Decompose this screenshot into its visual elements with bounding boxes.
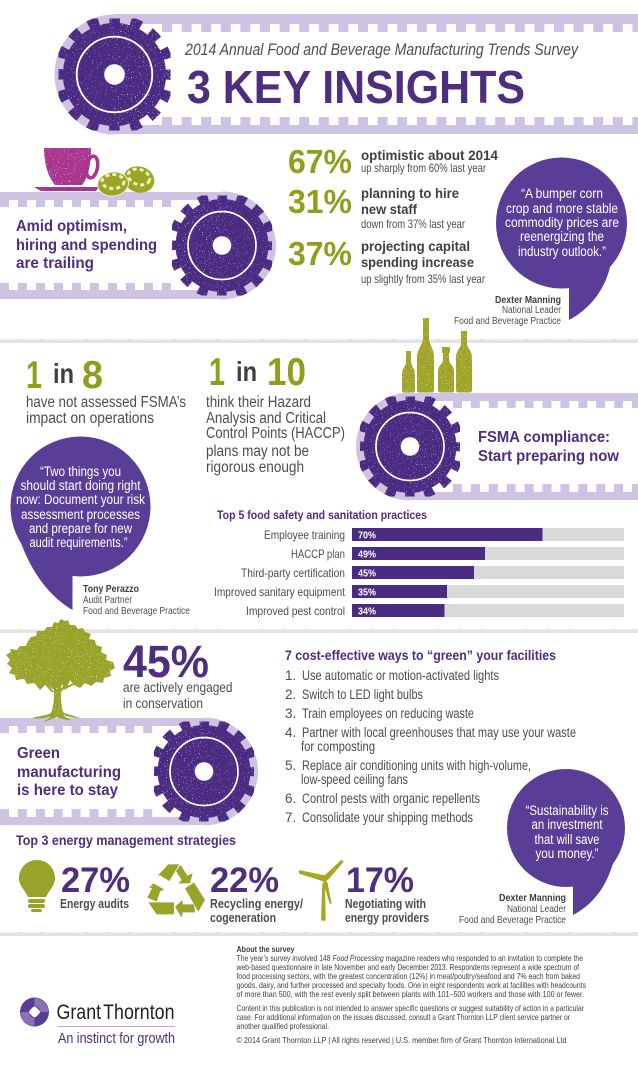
green heading: Green xyxy=(17,745,60,762)
bar: third-party certification xyxy=(241,566,624,580)
stat: 45% conservation: are actively engaged xyxy=(123,679,232,695)
list: 7 ways to green facilities: 2. xyxy=(285,687,296,702)
text block: about the survey: another qualified professional. xyxy=(236,1021,329,1031)
callout: corn quote: industry outlook.” xyxy=(518,244,606,259)
quote attribution: Dexter Manning: Food and Beverage Practice xyxy=(454,315,561,327)
bar: HACCP plan: HACCP plan xyxy=(291,547,345,561)
FSMA band xyxy=(356,392,638,500)
green heading: is here to stay xyxy=(17,782,118,799)
stat: 1 in 8: 1 xyxy=(26,354,42,397)
icon: recycling arrows xyxy=(147,864,205,918)
icon: header gear xyxy=(59,19,170,130)
bar: employee training xyxy=(264,528,624,542)
callout: risk assessment quote: assessment processes xyxy=(21,507,140,522)
stat: 1 in 8: impact on operations xyxy=(26,410,154,427)
quote attribution: Dexter Manning xyxy=(454,294,561,327)
green heading: manufacturing xyxy=(17,764,121,781)
list: 7 ways to green facilities: 3. xyxy=(285,706,296,721)
callout: corn quote: “A bumper corn xyxy=(521,186,603,201)
strategy: energy audits xyxy=(19,860,130,912)
bar: HACCP plan: 49% xyxy=(358,550,376,560)
bar: third-party certification: Third-party certification xyxy=(241,566,345,580)
stat: 31% hiring: down from 37% last year xyxy=(361,217,465,231)
green heading xyxy=(17,745,121,799)
list: 7 ways to green facilities: Partner with local greenhouses that may use your waste xyxy=(302,725,576,740)
panel: optimism xyxy=(0,143,627,327)
FSMA heading: FSMA compliance: xyxy=(478,429,610,446)
stat: 37% capital spending: up slightly from 35% last year xyxy=(361,272,485,286)
list: 7 ways to green facilities: 7. xyxy=(285,810,296,825)
stat: 67% optimistic: 67% xyxy=(288,143,352,180)
stat: 1 in 8: have not assessed FSMA’s xyxy=(26,394,186,411)
optimism heading: hiring and spending xyxy=(16,237,157,254)
stat: 1 in 10: 1 xyxy=(209,351,225,394)
quote attribution: Dexter Manning: Food and Beverage Practice xyxy=(459,914,566,926)
icon: bottles xyxy=(402,318,472,392)
list: 7 ways to green facilities: Switch to LED light bulbs xyxy=(302,687,423,702)
strategy: recycling energy: Recycling energy/ xyxy=(210,897,303,911)
bar: improved pest control: Improved pest control xyxy=(246,604,345,618)
callout: sustainability quote: that will save xyxy=(534,832,600,847)
callout: corn quote: reenergizing the xyxy=(520,229,604,244)
callout: risk assessment quote: now: Document your risk xyxy=(16,492,145,507)
icon: tree xyxy=(6,619,115,722)
quote attribution: Dexter Manning: National Leader xyxy=(502,304,561,316)
green band xyxy=(0,718,258,826)
list: 7 ways to green facilities: Train employees on reducing waste xyxy=(302,706,474,721)
callout: sustainability quote: you money.” xyxy=(536,846,598,861)
icon: wind turbine xyxy=(299,860,344,921)
text block: about the survey xyxy=(236,944,586,1045)
stat: 31% hiring xyxy=(288,183,465,231)
bar: third-party certification: 45% xyxy=(358,568,376,580)
quote attribution: Tony Perazzo: Audit Partner xyxy=(83,594,132,606)
stat: 37% capital spending: projecting capital xyxy=(361,238,470,254)
stat: 45% conservation: 45% xyxy=(123,636,209,687)
stat: 37% capital spending: 37% xyxy=(288,235,352,272)
optimism band xyxy=(0,192,276,300)
callout: corn quote xyxy=(496,158,627,320)
quote attribution: Tony Perazzo: Food and Beverage Practice xyxy=(83,605,190,617)
list: 7 ways to green facilities: 7 cost-effective ways to “green” your facilities xyxy=(285,647,556,663)
bar: improved sanitary equipment: 35% xyxy=(358,588,376,598)
list: 7 ways to green facilities: 1. xyxy=(285,668,296,683)
callout: corn quote: crop and more stable xyxy=(506,201,618,216)
list: 7 ways to green facilities xyxy=(285,647,576,825)
optimism heading xyxy=(16,218,157,272)
strategy: recycling energy: cogeneration xyxy=(210,911,276,925)
quote attribution: Dexter Manning: National Leader xyxy=(507,903,566,915)
icon: optimism gear xyxy=(172,196,272,296)
stat: 1 in 8: 8 xyxy=(82,354,103,397)
stat: 31% hiring: new staff xyxy=(361,201,417,217)
stat: 37% capital spending xyxy=(288,235,485,286)
stat: 1 in 10: think their Hazard xyxy=(206,394,311,411)
stat: 31% hiring: 31% xyxy=(288,183,352,220)
list: 7 ways to green facilities: Replace air conditioning units with high-volume, xyxy=(302,758,531,773)
bar chart: food safety practices xyxy=(214,508,624,618)
callout: sustainability quote: “Sustainability is xyxy=(526,803,609,818)
list: 7 ways to green facilities: Use automatic or motion-activated lights xyxy=(302,668,499,683)
text block: about the survey: © 2014 Grant Thornton LLP | All rights reserved | U.S. member firm of Grant Thornton International Ltd xyxy=(236,1035,567,1045)
header band xyxy=(55,14,638,134)
icon: FSMA gear xyxy=(360,396,460,496)
callout: risk assessment quote xyxy=(10,436,150,610)
text block: about the survey: case. For additional information on the issues discussed, consult a Grant Thornton LLP client service partner or xyxy=(236,1012,570,1022)
title: 3 KEY INSIGHTS xyxy=(187,61,525,113)
stat: 1 in 8 xyxy=(26,354,186,427)
icon: light bulb xyxy=(19,860,55,912)
FSMA heading xyxy=(478,429,620,465)
text block: about the survey: of more than 500, with the rest evenly split between plants with 101–500 workers and those with 100 or fewer. xyxy=(236,989,584,999)
bar chart: food safety practices: Top 5 food safety and sanitation practices xyxy=(217,508,427,522)
optimism heading: are trailing xyxy=(16,255,94,272)
callout: corn quote: commodity prices are xyxy=(505,215,619,230)
quote attribution: Dexter Manning: Dexter Manning xyxy=(495,294,561,306)
stat: 45% conservation: in conservation xyxy=(123,695,203,711)
strategy: energy audits: Energy audits xyxy=(60,897,129,911)
bar: HACCP plan xyxy=(291,547,624,561)
quote attribution: Tony Perazzo xyxy=(83,583,190,617)
bar: employee training: Employee training xyxy=(264,528,345,542)
stat: 67% optimistic xyxy=(288,143,498,180)
FSMA heading: Start preparing now xyxy=(478,448,620,465)
callout: sustainability quote xyxy=(507,769,625,915)
strategy: negotiating with providers: energy providers xyxy=(345,911,429,925)
list: 7 ways to green facilities: 4. xyxy=(285,725,296,740)
strategy: energy audits: 27% xyxy=(61,861,130,900)
callout: risk assessment quote: “Two things you xyxy=(40,464,121,479)
strategy: negotiating with providers: 17% xyxy=(346,861,414,900)
list: 7 ways to green facilities: low-speed ceiling fans xyxy=(301,772,408,787)
stat: 1 in 10: in xyxy=(236,356,257,387)
quote attribution: Dexter Manning: Dexter Manning xyxy=(499,892,566,904)
energy strategies heading: Top 3 energy management strategies xyxy=(16,832,236,848)
list: 7 ways to green facilities: 6. xyxy=(285,791,296,806)
logo: Grant Thornton: Grant Thornton xyxy=(56,1001,174,1024)
stat: 1 in 10 xyxy=(206,351,345,476)
strategy: negotiating with providers xyxy=(299,860,429,925)
stat: 1 in 10: rigorous enough xyxy=(206,459,304,476)
bar: improved pest control xyxy=(246,604,624,618)
stat: 31% hiring: planning to hire xyxy=(361,185,459,201)
stat: 1 in 10: 10 xyxy=(267,351,306,394)
stat: 1 in 10: plans may not be xyxy=(206,443,309,460)
stat: 67% optimistic: optimistic about 2014 xyxy=(361,147,498,163)
logo: Grant Thornton xyxy=(20,998,175,1047)
bar: improved pest control: 34% xyxy=(358,606,376,618)
text block: about the survey: About the survey xyxy=(236,944,295,954)
bar: improved sanitary equipment xyxy=(214,585,624,599)
stat: 67% optimistic: up sharply from 60% last year xyxy=(361,161,486,175)
stat: 1 in 8: in xyxy=(53,358,74,389)
panel: green manufacturing xyxy=(0,619,625,926)
optimism heading: Amid optimism, xyxy=(16,218,127,235)
callout: risk assessment quote: audit requirements.” xyxy=(30,535,128,550)
list: 7 ways to green facilities: 5. xyxy=(285,758,296,773)
logo: Grant Thornton: An instinct for growth xyxy=(58,1031,175,1047)
bar: employee training: 70% xyxy=(358,530,376,542)
quote attribution: Dexter Manning xyxy=(459,892,566,926)
panel: FSMA xyxy=(10,318,638,618)
icon: green gear xyxy=(154,722,254,822)
callout: sustainability quote: an investment xyxy=(532,817,603,832)
icon: coffee cup and doughnuts xyxy=(34,148,158,198)
header panel xyxy=(55,14,638,134)
strategy: negotiating with providers: Negotiating with xyxy=(345,897,426,911)
list: 7 ways to green facilities: for composting xyxy=(301,739,375,754)
callout: risk assessment quote: should start doing right xyxy=(20,478,141,493)
stat: 1 in 10: Analysis and Critical xyxy=(206,410,326,427)
strategy: recycling energy: 22% xyxy=(210,861,279,900)
bar: improved sanitary equipment: Improved sanitary equipment xyxy=(214,585,346,599)
list: 7 ways to green facilities: Control pests with organic repellents xyxy=(302,791,480,806)
text block: about the survey: The year’s survey involved 148 Food Processing magazine readers who responded to an invitation to complete the xyxy=(236,953,583,963)
stat: 45% conservation xyxy=(123,636,232,711)
strategy: recycling energy xyxy=(147,861,303,925)
stat: 37% capital spending: spending increase xyxy=(361,254,474,270)
quote attribution: Tony Perazzo: Tony Perazzo xyxy=(83,583,139,595)
stat: 1 in 10: Control Points (HACCP) xyxy=(206,425,345,442)
list: 7 ways to green facilities: Consolidate your shipping methods xyxy=(302,810,473,825)
callout: risk assessment quote: and prepare for new xyxy=(29,521,132,536)
